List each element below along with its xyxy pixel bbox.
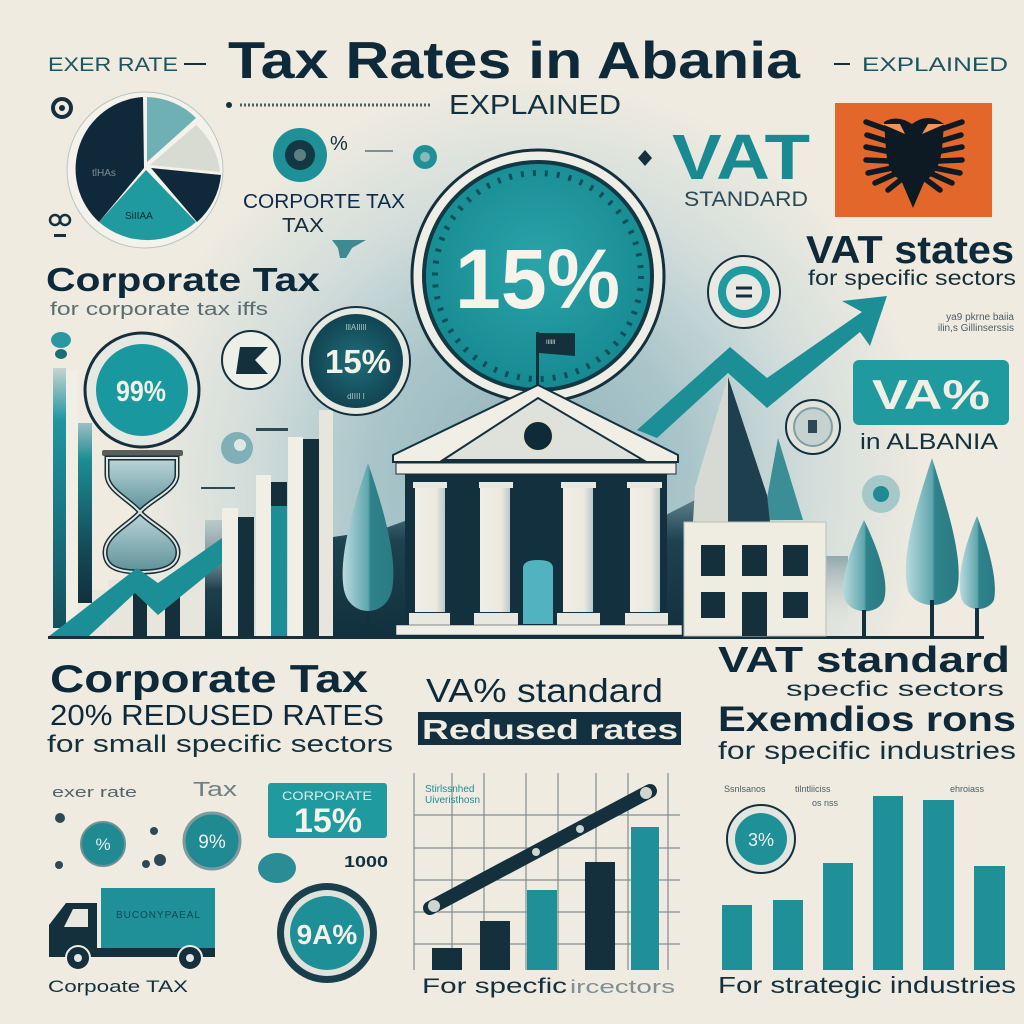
lower middle text: Redused rates <box>422 714 678 745</box>
lower left icons: 9% <box>198 832 226 853</box>
footer label left: Corpoate TAX <box>48 977 188 996</box>
small icon badge <box>222 331 280 389</box>
truck: BUCONYPAEAL <box>116 910 200 921</box>
coin and percent: % <box>330 133 348 155</box>
in Albania label: in ALBANIA <box>860 429 998 454</box>
coin right <box>708 256 780 328</box>
coin 99% on hourglass <box>85 333 199 447</box>
flag on building <box>536 332 575 388</box>
hourglass <box>102 450 183 572</box>
truck <box>49 888 215 970</box>
VAT states: ya9 pkrne baiia <box>946 312 1014 323</box>
right hill band <box>826 556 848 634</box>
lower right text: for specific industries <box>718 737 1016 765</box>
right chart <box>722 784 1005 970</box>
right chart: tilntliiciss <box>795 784 831 794</box>
hill backdrop <box>333 500 695 636</box>
lower right text: specfic sectors <box>786 678 1004 701</box>
small circle icon <box>786 400 840 454</box>
big 15% dial: 15% <box>455 232 620 326</box>
heading: Corporate Tax: Corporate Tax <box>46 261 321 298</box>
VAT standard: VAT <box>672 121 810 193</box>
corporate tax small label <box>243 191 405 237</box>
coin 15%: dIIII I <box>347 392 365 401</box>
right chart: Ssnlsanos <box>724 784 766 794</box>
lower left icons: Tax <box>193 779 237 801</box>
middle chart: Stirlssnhed <box>425 784 474 795</box>
small teal circle <box>862 475 900 513</box>
pie chart <box>67 92 223 248</box>
VAT states: VAT states <box>806 229 1014 272</box>
heading: Corporate Tax: for corporate tax iffs <box>50 299 268 319</box>
smudge icon <box>332 240 366 258</box>
small icon: target <box>53 99 71 117</box>
lower middle text: VA% standard <box>426 672 663 709</box>
lower left text <box>47 658 393 758</box>
VA% badge <box>853 360 1009 425</box>
right chart: 3% <box>748 830 774 850</box>
right chart: os nss <box>812 798 839 808</box>
big 15% dial <box>412 150 664 402</box>
lower right text: VAT standard <box>718 639 1010 680</box>
title: EXPLAINED <box>862 55 1008 76</box>
VAT states: ilin,s Gillinserssis <box>938 323 1014 334</box>
number 1000: 1000 <box>344 854 388 871</box>
middle chart <box>414 773 680 970</box>
lower left icons: % <box>95 835 111 854</box>
small icon: rings <box>50 215 70 237</box>
dotted rule <box>226 102 430 108</box>
badge 15%: CORPORATE <box>282 789 372 803</box>
trees right <box>843 458 995 636</box>
lower left text: Corporate Tax <box>50 658 368 701</box>
lower left text: 20% REDUSED RATES <box>50 700 384 732</box>
pie chart: SiIIAA <box>125 211 153 222</box>
small teal icon above bars <box>51 332 71 359</box>
VAT states: for specific sectors <box>808 267 1016 290</box>
coin 99% on hourglass: 99% <box>116 376 166 408</box>
lower right text <box>718 639 1016 765</box>
lower middle text <box>418 672 681 745</box>
seal 9A% <box>277 883 377 983</box>
rising arrow <box>637 296 887 438</box>
Albanian flag <box>835 103 992 217</box>
bank building <box>393 385 682 635</box>
teal cone <box>763 438 803 520</box>
corporate tax small label: TAX <box>282 215 324 237</box>
flag on building: IIlIlI <box>546 340 556 346</box>
seal 9A%: 9A% <box>297 919 357 950</box>
title: EXER RATE <box>48 55 178 76</box>
middle footer label: For specfic <box>422 975 567 998</box>
tree left of building <box>343 463 393 636</box>
lower right text: Exemdios rons <box>718 700 1016 739</box>
ground line <box>48 636 984 639</box>
corporate tax small label: CORPORTE TAX <box>243 191 405 213</box>
badge 15%: 15% <box>294 802 362 840</box>
title <box>48 32 1008 120</box>
middle footer faded label: ircectors <box>570 977 675 997</box>
pie chart: tlHAs <box>92 168 116 179</box>
VAT states <box>806 229 1016 334</box>
right footer label: For strategic industries <box>718 972 1016 998</box>
middle chart: Uiveristhosn <box>425 795 480 806</box>
VAT standard: STANDARD <box>684 188 808 211</box>
lower left icons <box>52 779 296 883</box>
coin 15%: 15% <box>325 343 391 380</box>
lower left text: for small specific sectors <box>47 731 393 758</box>
lower left icons: exer rate <box>52 784 137 801</box>
coin 15%: lllAIIllI <box>346 323 366 332</box>
coin 15% <box>302 307 410 415</box>
VA% badge: VA% <box>872 371 990 418</box>
heading: Corporate Tax <box>46 261 321 319</box>
badge 15% <box>268 783 387 840</box>
title: EXPLAINED <box>449 89 621 120</box>
smudge marks <box>201 428 288 489</box>
title: Tax Rates in Abania <box>228 32 801 90</box>
right chart: ehroiass <box>950 784 985 794</box>
coin and percent <box>273 128 437 182</box>
small building <box>684 522 826 636</box>
left bar chart <box>53 368 333 636</box>
spire <box>693 377 770 522</box>
VAT standard <box>638 121 810 211</box>
rising arrow on bars <box>48 538 222 637</box>
